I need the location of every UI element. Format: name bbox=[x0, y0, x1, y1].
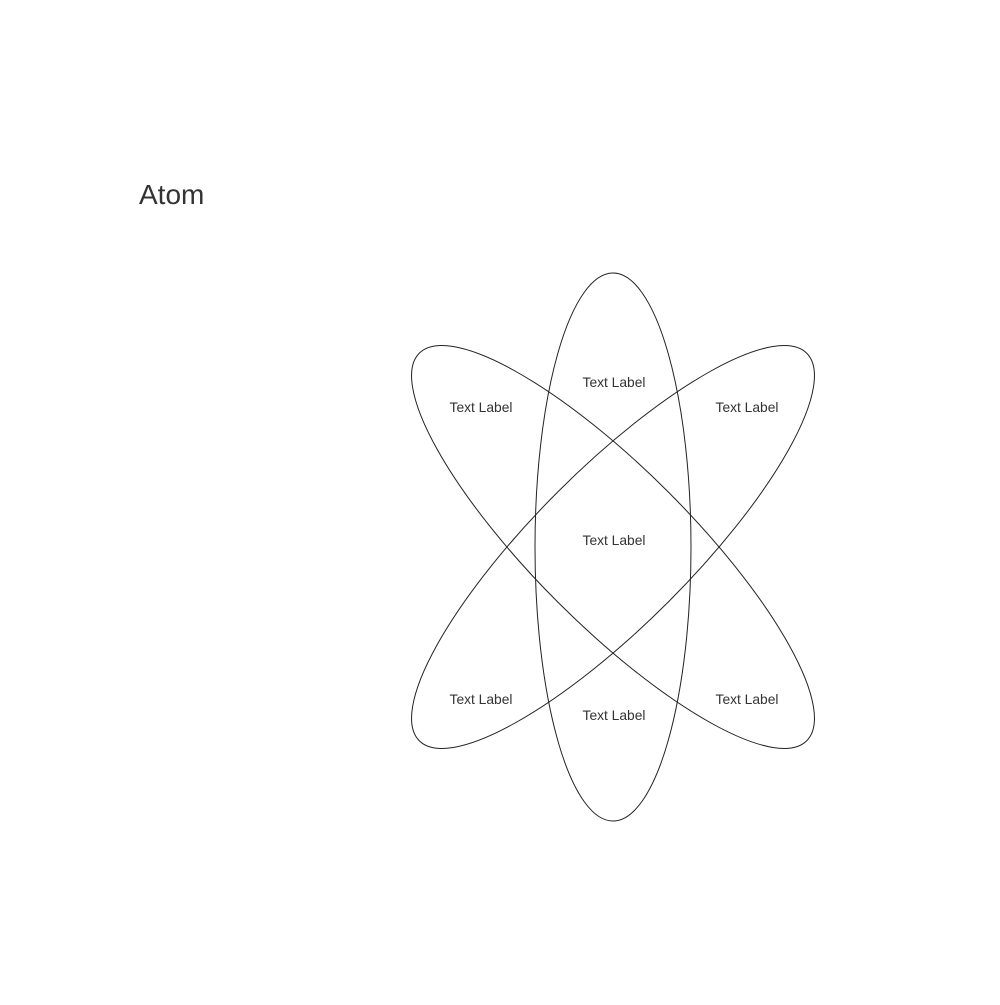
title: Atom bbox=[139, 179, 204, 210]
label center: Text Label bbox=[583, 533, 645, 548]
orbit: diagonal right bbox=[364, 298, 862, 796]
label upper right: Text Label bbox=[716, 400, 778, 415]
label bottom: Text Label bbox=[583, 708, 645, 723]
orbit: vertical bbox=[535, 273, 691, 821]
orbit: diagonal left bbox=[364, 298, 862, 796]
label top: Text Label bbox=[583, 375, 645, 390]
label lower left: Text Label bbox=[450, 692, 512, 707]
label lower right: Text Label bbox=[716, 692, 778, 707]
atom diagram bbox=[364, 273, 862, 821]
labels bbox=[450, 375, 778, 723]
label upper left: Text Label bbox=[450, 400, 512, 415]
